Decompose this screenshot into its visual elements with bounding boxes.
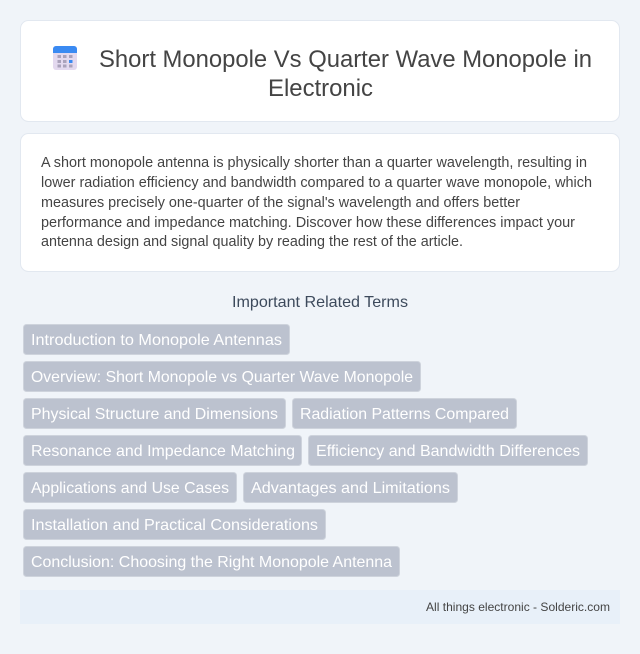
footer: [20, 590, 620, 624]
tag: resonance: Resonance and Impedance Matching: [31, 443, 295, 460]
tag: conclusion: [24, 546, 400, 576]
title: Short Monopole Vs Quarter Wave Monopole in: [99, 46, 592, 73]
title: Electronic: [268, 75, 373, 102]
tag: installation: [24, 510, 326, 540]
tag: efficiency: Efficiency and Bandwidth Differences: [316, 443, 580, 460]
tag: physical structure: Physical Structure and Dimensions: [31, 406, 278, 423]
panel: intro text card: antenna design and signal quality by reading the rest of the article.: [41, 234, 463, 250]
tag: overview: Overview: Short Monopole vs Quarter Wave Monopole: [31, 369, 413, 386]
tag: advantages: Advantages and Limitations: [251, 480, 450, 497]
panel: intro text card: [20, 134, 620, 272]
icon: calendar: [53, 46, 77, 70]
tag: conclusion: Conclusion: Choosing the Right Monopole Antenna: [31, 554, 392, 571]
tag: resonance: [24, 436, 302, 466]
tag: advantages: [244, 472, 458, 502]
tag list: [24, 324, 588, 576]
panel: title card: [20, 20, 620, 122]
tag: efficiency: [308, 436, 588, 466]
panel: intro text card: A short monopole antenna is physically shorter than a quarter wavelength, resulting in: [41, 155, 587, 171]
panel: intro text card: measures precisely one-quarter of the signal's wavelength and offers better: [41, 195, 520, 211]
footer: All things electronic - Solderic.com: [426, 600, 610, 614]
tag: installation: Installation and Practical Considerations: [31, 517, 318, 534]
heading: important related terms: Important Related Terms: [232, 294, 408, 311]
tag: introduction: [24, 324, 290, 354]
tag: physical structure: [24, 398, 286, 428]
tag: radiation patterns: [292, 398, 516, 428]
tag: radiation patterns: Radiation Patterns Compared: [300, 406, 509, 423]
tag: introduction: Introduction to Monopole Antennas: [31, 332, 282, 349]
panel: intro text card: lower radiation efficiency and bandwidth compared to a quarter wave monopole, which: [41, 175, 592, 191]
panel: intro text card: performance and impedance matching. Discover how these differences impact your: [41, 215, 575, 231]
tag: applications: [24, 472, 236, 502]
tag: applications: Applications and Use Cases: [31, 480, 229, 497]
title: [99, 46, 592, 102]
tag: overview: [24, 362, 420, 392]
